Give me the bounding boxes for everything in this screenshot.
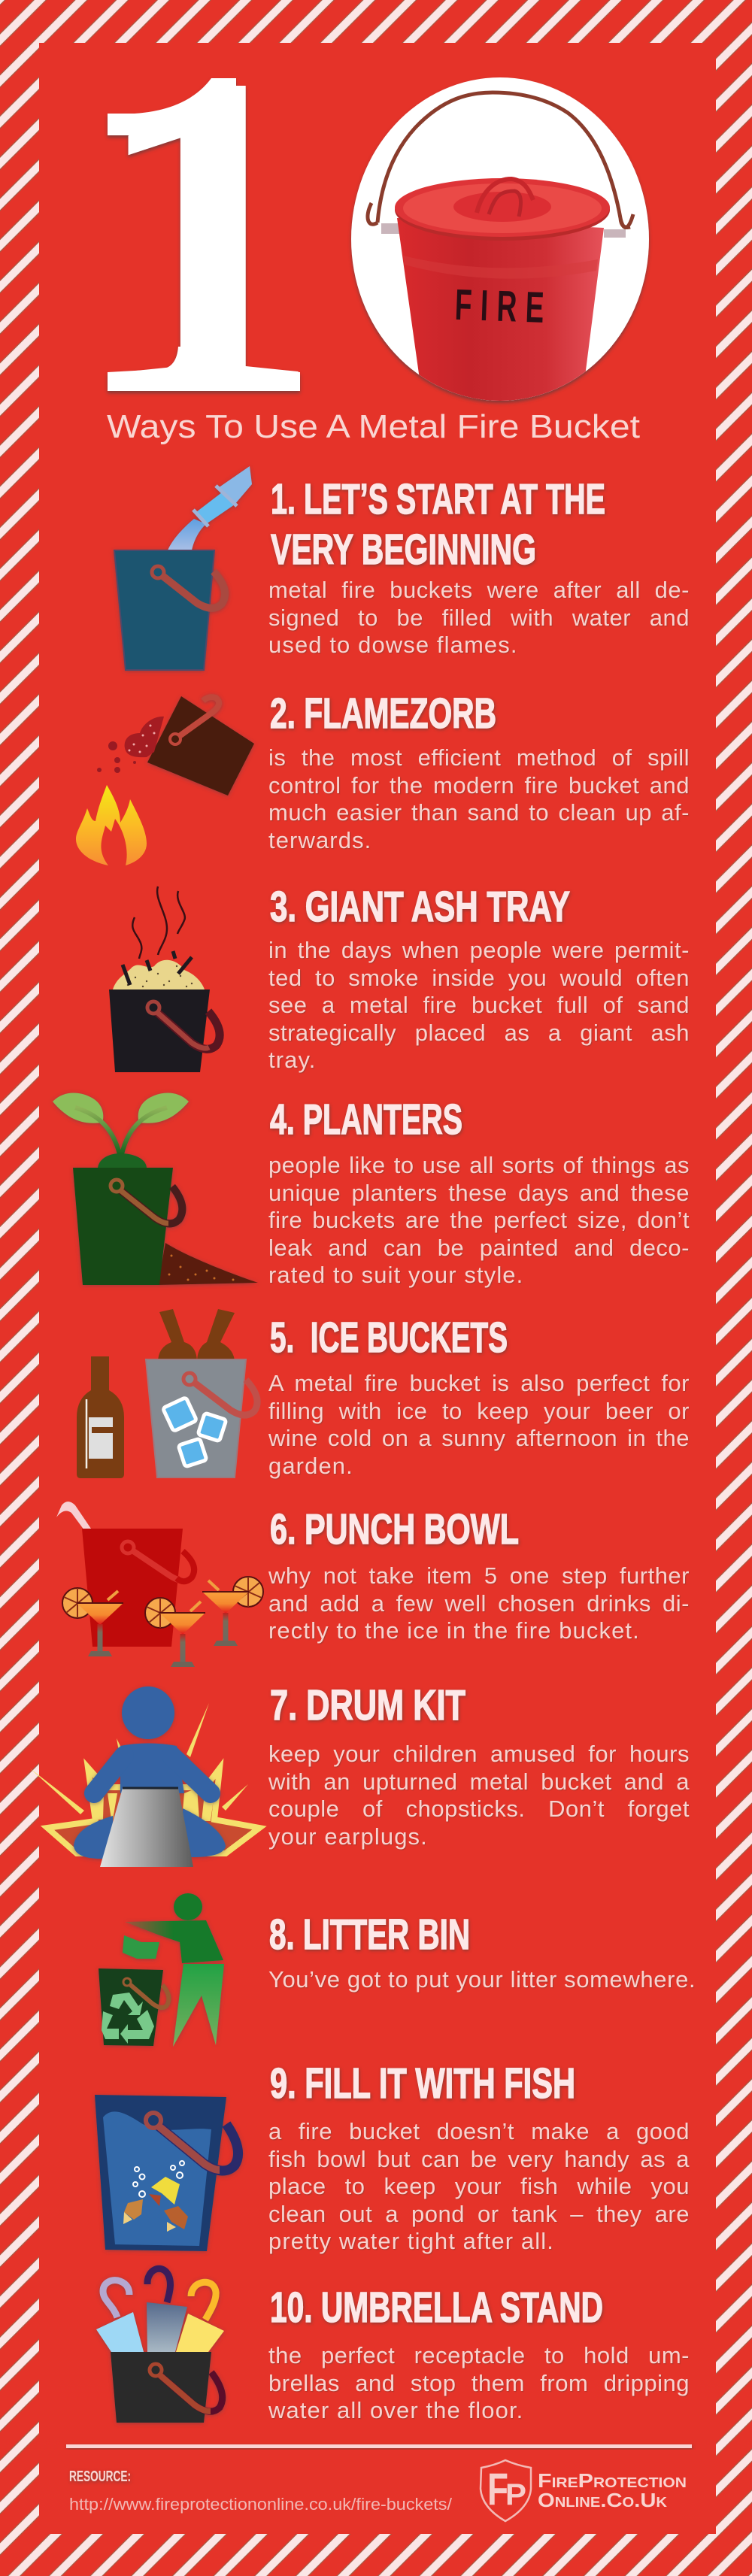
body text: see a metal fire bucket full of sand — [268, 992, 690, 1018]
body text: unique planters these days and these — [268, 1179, 690, 1206]
resource label: RESOURCE: — [69, 2468, 131, 2485]
body text: place to keep your fish while you — [268, 2173, 690, 2199]
heading: VERY BEGINNING — [271, 526, 536, 574]
body text — [268, 577, 690, 661]
icon: ice bucket with bottles — [77, 1309, 257, 1478]
cocktail 2 — [145, 1598, 205, 1667]
body text — [268, 937, 690, 1075]
body text: fish bowl but can be very handy as a — [268, 2146, 690, 2171]
body text: leak and can be painted and deco- — [268, 1235, 690, 1260]
icon: child drumming on upturned bucket — [30, 1687, 259, 1867]
item 2 — [76, 689, 690, 865]
body text: rectly to the ice in the fire bucket. — [268, 1617, 640, 1644]
body text: much easier than sand to clean up af- — [268, 799, 690, 826]
heading — [271, 475, 605, 574]
body text: with an upturned metal bucket and a — [268, 1768, 690, 1794]
zero oval containing fire bucket photo — [351, 77, 649, 406]
icon: shield with FP monogram: F — [487, 2464, 508, 2514]
heading: 4. PLANTERS — [270, 1096, 462, 1144]
item 6 — [56, 1502, 690, 1667]
body text: fire buckets are the perfect size, don’t — [268, 1207, 690, 1233]
heading: 6. PUNCH BOWL — [270, 1505, 519, 1553]
impact burst — [30, 1703, 259, 1853]
icon: ash tray bucket with sand — [109, 886, 220, 1072]
logo wordmark — [538, 2469, 687, 2511]
logo wordmark: Online.Co.Uk — [538, 2489, 667, 2511]
body text: A metal fire bucket is also perfect for — [268, 1370, 690, 1396]
item 9 — [95, 2059, 690, 2256]
body text: and add a few well chosen drinks di- — [268, 1590, 690, 1617]
heading: 3. GIANT ASH TRAY — [270, 883, 570, 931]
subtitle: Ways To Use A Metal Fire Bucket — [107, 408, 640, 445]
body text: water all over the floor. — [268, 2397, 523, 2423]
body text — [268, 2342, 690, 2426]
heading: 7. DRUM KIT — [270, 1681, 465, 1729]
logo wordmark: FireProtection — [538, 2469, 687, 2492]
body text — [268, 2118, 690, 2256]
item 4 — [53, 1093, 690, 1290]
body text: metal fire buckets were after all de- — [268, 577, 690, 603]
body text — [268, 744, 690, 856]
bucket label: FIRE — [454, 280, 553, 332]
footer — [69, 2460, 687, 2521]
body text: terwards. — [268, 827, 371, 853]
icon: tipped bucket pouring onto flame — [76, 696, 254, 865]
cocktail 3 — [202, 1577, 263, 1646]
item 8 — [99, 1893, 712, 2047]
icon: punch bowl bucket with cocktails — [56, 1502, 263, 1667]
body text: pretty water tight after all. — [268, 2228, 554, 2254]
item 7 — [30, 1681, 690, 1867]
body text: rated to suit your style. — [268, 1262, 523, 1288]
body text: clean out a pond or tank – they are — [268, 2200, 690, 2227]
body text: couple of chopsticks. Don’t forget — [268, 1796, 690, 1822]
body text: your earplugs. — [268, 1823, 428, 1850]
icon: red fire bucket — [368, 92, 633, 406]
heading: 1. LET’S START AT THE — [271, 475, 605, 523]
body text: a fire bucket doesn’t make a good — [268, 2118, 690, 2144]
body text: keep your children amused for hours — [268, 1741, 690, 1767]
heading: 9. FILL IT WITH FISH — [270, 2059, 575, 2108]
icon: litter bin figure — [99, 1893, 224, 2047]
heading: 8. LITTER BIN — [269, 1911, 470, 1959]
item 1 — [114, 466, 690, 670]
item 10 — [96, 2268, 690, 2426]
logo — [481, 2460, 687, 2521]
body text: people like to use all sorts of things as — [268, 1152, 690, 1178]
body text: in the days when people were permit- — [268, 937, 690, 963]
body text: is the most efficient method of spill — [268, 744, 690, 771]
body text: control for the modern fire bucket and — [268, 771, 690, 799]
icon: planter bucket with seedling — [53, 1093, 258, 1285]
body text — [268, 1370, 690, 1481]
icon: shield with FP monogram: P — [505, 2478, 526, 2511]
heading: 2. FLAMEZORB — [270, 689, 496, 738]
resource url: http://www.fireprotectiononline.co.uk/fire-buckets/ — [69, 2495, 453, 2514]
body text: garden. — [268, 1453, 353, 1478]
body text — [268, 1152, 690, 1290]
body text: wine cold on a sunny afternoon in the — [268, 1425, 690, 1451]
body text: brellas and stop them from dripping — [268, 2370, 690, 2396]
icon: bucket filled by hose — [114, 466, 252, 670]
icon: umbrella stand bucket — [96, 2268, 224, 2423]
body text: filling with ice to keep your beer or — [268, 1397, 690, 1424]
body text: strategically placed as a giant ash — [268, 1020, 690, 1045]
body text: tray. — [268, 1047, 316, 1073]
item 5 — [77, 1309, 690, 1481]
body text: the perfect receptacle to hold um- — [268, 2342, 690, 2368]
body text — [268, 1741, 690, 1852]
body text: signed to be filled with water and — [268, 605, 690, 630]
icon: flame — [76, 785, 147, 865]
heading: 10. UMBRELLA STAND — [270, 2284, 603, 2332]
body text: ted to smoke inside you would often — [268, 964, 690, 991]
heading: 5. ICE BUCKETS — [270, 1314, 508, 1362]
item 3 — [109, 883, 690, 1075]
body text: You’ve got to put your litter somewhere. — [268, 1966, 696, 1993]
body text: why not take item 5 one step further — [268, 1562, 690, 1589]
title block — [91, 0, 649, 492]
icon: shield with FP monogram — [481, 2460, 531, 2521]
body text — [268, 1562, 690, 1647]
body text: used to dowse flames. — [268, 632, 518, 658]
icon: bucket with fish — [95, 2095, 238, 2251]
cocktail 1 — [62, 1588, 123, 1656]
